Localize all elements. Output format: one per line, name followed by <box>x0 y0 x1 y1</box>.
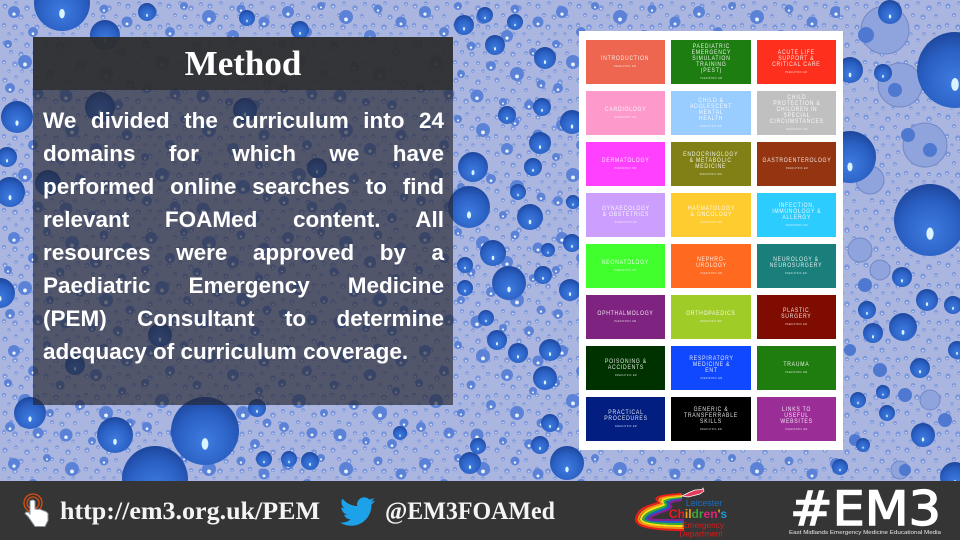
tile: endocrinology: MEDICINE <box>696 163 726 170</box>
tile: adolescent mental health: ADOLESCENT <box>690 103 732 110</box>
tile: generic skills <box>671 397 751 441</box>
tile: infection <box>757 193 836 237</box>
tile: ophthalmology <box>586 295 665 339</box>
tile: practical procedures <box>586 397 665 441</box>
tile: gastroenterology <box>757 142 836 186</box>
tile: gynaecology: GYNAECOLOGY <box>602 205 649 212</box>
tile: infection: IMMUNOLOGY & <box>772 208 821 215</box>
tile: useful websites: USEFUL <box>784 412 809 419</box>
tile: PEST: EMERGENCY <box>691 49 731 56</box>
tile: adolescent mental health: PAEDIATRIC EM <box>700 124 722 128</box>
tile: respiratory: PAEDIATRIC EM <box>700 376 722 380</box>
tile: respiratory <box>671 346 751 390</box>
tile: nephro-urology <box>671 244 751 288</box>
text block: method description <box>43 108 444 364</box>
tile: acute life support: PAEDIATRIC EM <box>785 70 808 74</box>
tile: cardiology: CARDIOLOGY <box>605 106 646 113</box>
tile: endocrinology: ENDOCRINOLOGY <box>683 151 739 158</box>
tile: poisoning: PAEDIATRIC EM <box>614 373 637 377</box>
tile: poisoning: ACCIDENTS <box>607 364 644 371</box>
tile: PEST: (PEST) <box>700 67 722 74</box>
icon: pointing hand <box>24 494 48 526</box>
text block: method description: resources were approved by a <box>43 240 444 265</box>
tile: nephro-urology: NEPHRO- <box>697 256 725 263</box>
tile: trauma <box>757 346 836 390</box>
tile: ophthalmology: PAEDIATRIC EM <box>614 319 637 323</box>
tile: infection: INFECTION, <box>778 202 815 209</box>
panel: method <box>33 37 453 405</box>
logo: Leicester Children's Emergency Department <box>636 488 727 538</box>
tile: useful websites: PAEDIATRIC EM <box>785 427 808 431</box>
tile: neurology: NEUROSURGERY <box>770 262 823 269</box>
tile: gastroenterology: GASTROENTEROLOGY <box>762 157 831 164</box>
tile: child protection: CHILD <box>787 94 806 101</box>
heading: Method <box>33 37 453 90</box>
tile: practical procedures: PROCEDURES <box>604 415 647 422</box>
tile: acute life support <box>757 40 836 84</box>
tile: adolescent mental health: HEALTH <box>699 115 723 122</box>
twitter handle: @EM3FOAMed <box>385 498 555 525</box>
logo: Leicester Children's Emergency Department: Children's <box>669 507 727 521</box>
tile: child protection: CIRCUMSTANCES <box>770 118 823 125</box>
tile: haematology <box>671 193 751 237</box>
tile: plastic surgery <box>757 295 836 339</box>
brand: #EM3: #EM3 <box>790 482 941 537</box>
tile: gynaecology: & OBSTETRICS <box>602 211 649 218</box>
tile: practical procedures: PRACTICAL <box>608 409 643 416</box>
icon: twitter bird <box>340 497 375 526</box>
tile: generic skills: TRANSFERRABLE <box>684 412 738 419</box>
heading: Method: Method <box>185 44 301 83</box>
tile: introduction: INTRODUCTION <box>601 55 650 62</box>
tile: practical procedures: PAEDIATRIC EM <box>614 424 637 428</box>
tile: acute life support: ACUTE LIFE <box>778 49 815 56</box>
tile: endocrinology: & METABOLIC <box>690 157 732 164</box>
tile: orthopaedics: ORTHOPAEDICS <box>686 310 736 317</box>
tile: PEST: PAEDIATRIC <box>692 43 730 50</box>
tile: adolescent mental health: CHILD & <box>698 97 724 104</box>
tile: infection: PAEDIATRIC EM <box>785 223 808 227</box>
pale large bubbles on the right edge <box>848 6 947 498</box>
tile: gastroenterology: PAEDIATRIC EM <box>785 166 808 170</box>
tile: gynaecology <box>586 193 665 237</box>
tile: acute life support: CRITICAL CARE <box>772 61 821 68</box>
tile: orthopaedics <box>671 295 751 339</box>
tile: plastic surgery: PAEDIATRIC EM <box>785 322 808 326</box>
tile: respiratory: MEDICINE & <box>692 361 730 368</box>
tile: neurology: PAEDIATRIC EM <box>785 271 808 275</box>
tile: useful websites <box>757 397 836 441</box>
tile: endocrinology <box>671 142 751 186</box>
tile: orthopaedics: PAEDIATRIC EM <box>700 319 722 323</box>
tile: generic skills: GENERIC & <box>694 406 728 413</box>
text block: method description: adequacy of curriculum coverage. <box>43 339 408 364</box>
tile: neonatology: NEONATOLOGY <box>602 259 649 266</box>
text block: method description: relevant FOAMed content. All <box>43 207 444 232</box>
link text: http://em3.org.uk/PEM <box>60 498 320 525</box>
logo: Leicester Children's Emergency Department: Emergency <box>682 520 725 530</box>
tile: useful websites: LINKS TO <box>782 406 811 413</box>
footer bar <box>0 481 960 540</box>
tile: useful websites: WEBSITES <box>780 418 813 425</box>
tile: neonatology: PAEDIATRIC EM <box>614 268 637 272</box>
tile: child protection: CHILDREN IN <box>776 106 817 113</box>
tile: trauma: PAEDIATRIC EM <box>785 370 808 374</box>
tile: neonatology <box>586 244 665 288</box>
tile: neurology: NEUROLOGY & <box>774 256 819 263</box>
tile: child protection: SPECIAL <box>783 112 810 119</box>
tile: respiratory: RESPIRATORY <box>689 355 733 362</box>
tile: adolescent mental health: MENTAL <box>699 109 723 116</box>
tile: poisoning: POISONING & <box>605 358 646 365</box>
tile: adolescent mental health <box>671 91 751 135</box>
tile: haematology: & ONCOLOGY <box>690 211 732 218</box>
tile: poisoning <box>586 346 665 390</box>
logo: Leicester Children's Emergency Department: Leicester <box>686 498 722 508</box>
text block: method description: (PEM) Consultant to determine <box>43 306 444 331</box>
tile: PEST: PAEDIATRIC EM <box>700 76 722 80</box>
tile: cardiology <box>586 91 665 135</box>
text block: method description: We divided the curriculum into 24 <box>43 108 444 133</box>
tile: acute life support: SUPPORT & <box>778 55 815 62</box>
tile: introduction: PAEDIATRIC EM <box>614 64 637 68</box>
tile: respiratory: ENT <box>705 367 717 374</box>
tile: haematology: PAEDIATRIC EM <box>700 220 722 224</box>
tile: plastic surgery: SURGERY <box>781 313 812 320</box>
tile: generic skills: PAEDIATRIC EM <box>700 427 722 431</box>
text block: method description: performed online searches to find <box>43 174 444 199</box>
tile: dermatology: DERMATOLOGY <box>602 157 649 164</box>
tile: gynaecology: PAEDIATRIC EM <box>614 220 637 224</box>
tile: dermatology: PAEDIATRIC EM <box>614 166 637 170</box>
text block: method description: Paediatric Emergency Medicine <box>43 273 444 298</box>
tile: child protection <box>757 91 836 135</box>
tile: plastic surgery: PLASTIC <box>783 307 810 314</box>
tile: PEST <box>671 40 751 84</box>
tile: PEST: SIMULATION <box>692 55 730 62</box>
tile: child protection: PROTECTION & <box>773 100 820 107</box>
panel: curriculum domains grid <box>579 31 843 450</box>
tile: infection: ALLERGY <box>782 214 811 221</box>
tile: child protection: PAEDIATRIC EM <box>785 127 808 131</box>
tile: endocrinology: PAEDIATRIC EM <box>700 172 722 176</box>
tile: ophthalmology: OPHTHALMOLOGY <box>597 310 654 317</box>
tile: introduction <box>586 40 665 84</box>
tile: nephro-urology: PAEDIATRIC EM <box>700 271 722 275</box>
tile: cardiology: PAEDIATRIC EM <box>614 115 637 119</box>
tile: generic skills: SKILLS <box>700 418 722 425</box>
brand tagline: East Midlands Emergency Medicine Educational Media <box>789 530 941 536</box>
logo: Leicester Children's Emergency Department: Department <box>679 528 723 538</box>
tile: nephro-urology: UROLOGY <box>696 262 726 269</box>
tile: trauma: TRAUMA <box>783 361 810 368</box>
tile: haematology: HAEMATOLOGY <box>687 205 735 212</box>
text block: method description: domains for which we have <box>43 141 444 166</box>
tile: PEST: TRAINING <box>696 61 726 68</box>
tile: dermatology <box>586 142 665 186</box>
tile: neurology <box>757 244 836 288</box>
